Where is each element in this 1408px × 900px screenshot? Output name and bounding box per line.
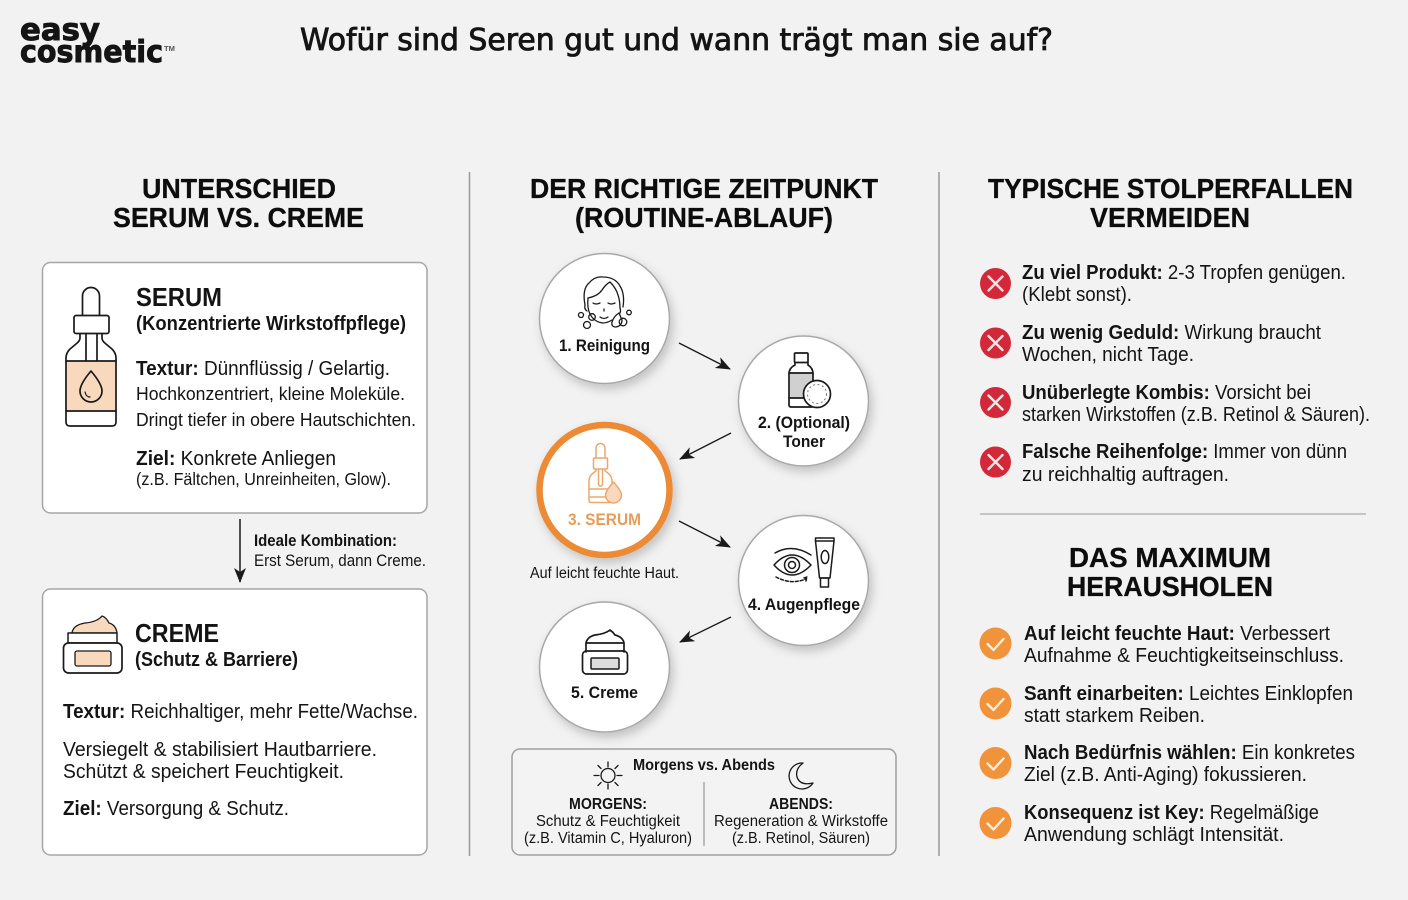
creme description	[63, 738, 377, 783]
arrow: serum to creme	[239, 519, 241, 582]
evening text	[714, 796, 888, 847]
serum goal: Ziel: Konkrete Anliegen	[136, 447, 336, 470]
pitfall 1: Zu viel Produkt: 2-3 Tropfen genügen.	[1022, 262, 1346, 284]
box title: Morgens vs. Abends	[633, 757, 775, 774]
heading: das Maximum herausholen: HERAUSHOLEN	[1067, 571, 1273, 602]
icon: sun	[594, 762, 622, 789]
icon: creme jar	[64, 616, 122, 673]
label: 2. (Optional) Toner	[758, 413, 850, 451]
heading: typische Stolperfallen	[988, 173, 1353, 233]
icon: orange serum bottle	[589, 444, 622, 503]
heading: typische Stolperfallen: VERMEIDEN	[1090, 202, 1250, 233]
icon: moon	[789, 763, 813, 789]
logo: easycosmetic: TM	[164, 46, 175, 53]
arrow: step 4 to 5	[680, 617, 731, 642]
tip 3: Nach Bedürfnis wählen: Ein konkretes	[1024, 742, 1355, 764]
panel: creme	[42, 589, 427, 855]
pitfall 3: starken Wirkstoffen (z.B. Retinol & Säuren).	[1022, 404, 1370, 426]
label: 3. Serum: 3. SERUM	[568, 510, 641, 529]
pitfall 3	[980, 382, 1370, 426]
morning text: MORGENS:	[569, 796, 647, 813]
heading: typische Stolperfallen: TYPISCHE STOLPERFALLEN	[988, 173, 1353, 204]
arrow: step 1 to 2	[679, 343, 730, 369]
serum description	[136, 383, 416, 430]
heading: Unterschied Serum vs. Creme: UNTERSCHIED	[142, 173, 336, 204]
tip 2: Sanft einarbeiten: Leichtes Einklopfen	[1024, 683, 1353, 705]
callout: ideale Kombination	[254, 532, 426, 570]
pitfall 4: Falsche Reihenfolge: Immer von dünn	[1022, 441, 1347, 463]
heading: das Maximum herausholen: DAS MAXIMUM	[1069, 542, 1271, 573]
creme description: Schützt & speichert Feuchtigkeit.	[63, 760, 344, 783]
serum texture: Textur: Dünnflüssig / Gelartig.	[136, 357, 390, 380]
evening text: (z.B. Retinol, Säuren)	[732, 830, 870, 847]
logo: easycosmetic	[20, 13, 175, 70]
tip 1: Auf leicht feuchte Haut: Verbessert	[1024, 623, 1330, 645]
tip 4	[980, 802, 1319, 846]
step 1: Reinigung	[540, 254, 670, 384]
arrow: step 2 to 3	[680, 433, 731, 459]
logo: easycosmetic: cosmetic	[20, 35, 163, 70]
tip 4: Anwendung schlägt Intensität.	[1024, 824, 1284, 846]
panel: serum	[42, 262, 427, 513]
heading: Unterschied Serum vs. Creme: SERUM VS. CREME	[113, 202, 364, 233]
morning text	[524, 796, 692, 847]
label: 1. Reinigung: 1. Reinigung	[559, 336, 650, 355]
morning text: (z.B. Vitamin C, Hyaluron)	[524, 830, 692, 847]
box divider	[703, 782, 705, 846]
icon: toner bottle and pad	[789, 353, 830, 408]
morning text: Schutz & Feuchtigkeit	[536, 813, 681, 830]
creme title: CREME	[135, 618, 219, 648]
step 3: Serum highlighted	[540, 425, 670, 555]
serum subtitle: (Konzentrierte Wirkstoffpflege)	[136, 313, 406, 335]
note: auf leicht feuchte Haut: Auf leicht feuchte Haut.	[530, 565, 679, 582]
arrow: step 3 to 4	[679, 521, 730, 547]
step 4: Augenpflege	[738, 516, 868, 646]
label: 2. (Optional) Toner: 2. (Optional)	[758, 413, 850, 432]
icon: jar	[582, 630, 628, 674]
label: 2. (Optional) Toner: Toner	[783, 432, 825, 451]
heading: der richtige Zeitpunkt: (ROUTINE-ABLAUF)	[575, 202, 833, 233]
label: 5. Creme: 5. Creme	[571, 683, 638, 702]
pitfall 2	[980, 322, 1321, 366]
tip 4: Konsequenz ist Key: Regelmäßige	[1024, 802, 1319, 824]
title: Wofür sind Seren gut und wann trägt man sie auf?	[300, 23, 1053, 58]
tip 2: statt starkem Reiben.	[1024, 705, 1205, 727]
heading: der richtige Zeitpunkt	[530, 173, 878, 233]
section divider	[980, 513, 1366, 515]
creme description: Versiegelt & stabilisiert Hautbarriere.	[63, 738, 377, 761]
serum description: Dringt tiefer in obere Hautschichten.	[136, 409, 416, 430]
icon: face cleansing	[578, 277, 631, 328]
pitfall 1: (Klebt sonst).	[1022, 284, 1132, 306]
tip 3	[980, 742, 1355, 786]
heading: das Maximum herausholen	[1067, 542, 1273, 602]
tip 3: Ziel (z.B. Anti-Aging) fokussieren.	[1024, 764, 1307, 786]
creme subtitle: (Schutz & Barriere)	[135, 649, 298, 671]
step 5: Creme	[540, 602, 670, 732]
creme goal: Ziel: Versorgung & Schutz.	[63, 797, 289, 820]
pitfall 2: Wochen, nicht Tage.	[1022, 344, 1194, 366]
evening text: Regeneration & Wirkstoffe	[714, 813, 888, 830]
pitfall 3: Unüberlegte Kombis: Vorsicht bei	[1022, 382, 1311, 404]
tip 1: Aufnahme & Feuchtigkeitseinschluss.	[1024, 645, 1344, 667]
icon: serum bottle	[66, 288, 116, 426]
column divider: left	[468, 172, 470, 856]
tip 2	[980, 683, 1353, 727]
creme texture: Textur: Reichhaltiger, mehr Fette/Wachse.	[63, 700, 418, 723]
heading: Unterschied Serum vs. Creme	[113, 173, 364, 233]
heading: der richtige Zeitpunkt: DER RICHTIGE ZEITPUNKT	[530, 173, 878, 204]
evening text: ABENDS:	[769, 796, 833, 813]
column divider: right	[938, 172, 940, 856]
serum title: SERUM	[136, 282, 222, 312]
serum goal: (z.B. Fältchen, Unreinheiten, Glow).	[136, 469, 391, 489]
pitfall 4: zu reichhaltig auftragen.	[1022, 464, 1229, 486]
logo: easycosmetic: easy	[20, 13, 100, 48]
serum goal	[136, 447, 391, 489]
icon: eye and tube	[774, 538, 834, 587]
serum description: Hochkonzentriert, kleine Moleküle.	[136, 383, 405, 404]
pitfall 1	[980, 262, 1346, 306]
pitfall 2: Zu wenig Geduld: Wirkung braucht	[1022, 322, 1321, 344]
callout: ideale Kombination: Erst Serum, dann Creme.	[254, 551, 426, 570]
label: 4. Augenpflege: 4. Augenpflege	[748, 595, 860, 614]
tip 1	[980, 623, 1344, 667]
pitfall 4	[980, 441, 1347, 486]
panel: morgens vs. abends	[512, 749, 896, 855]
callout: ideale Kombination: Ideale Kombination:	[254, 532, 397, 550]
step 2: Toner	[738, 336, 868, 466]
